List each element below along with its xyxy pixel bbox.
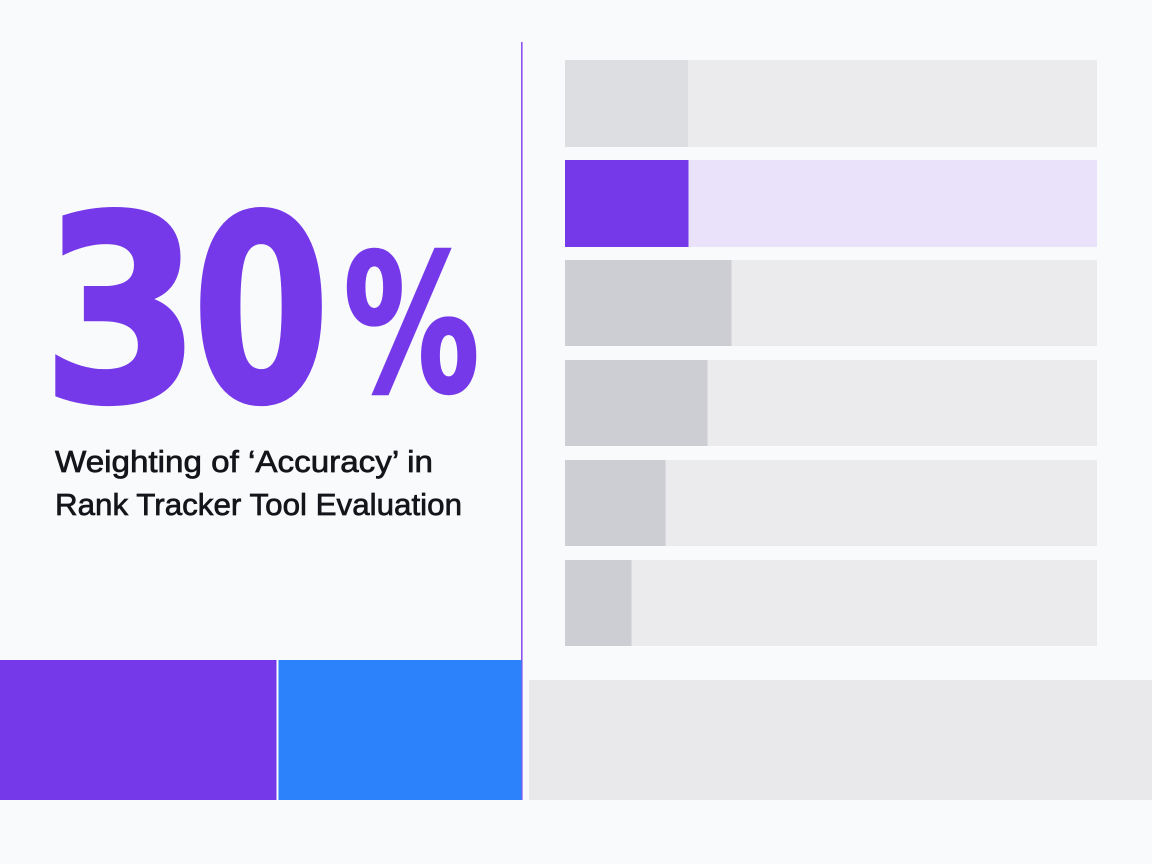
grey footer block — [529, 680, 1152, 800]
bar 2: highlighted — [565, 160, 1097, 247]
bar 4 — [565, 360, 1097, 446]
blue footer block — [278, 660, 522, 800]
bar chart — [565, 60, 1097, 646]
caption line 2: Rank Tracker Tool Evaluation — [55, 487, 462, 522]
digit 3: 3 — [42, 162, 201, 462]
vertical divider — [521, 42, 523, 800]
caption — [55, 444, 462, 522]
bar 1 — [565, 60, 1097, 147]
bar 5 — [565, 460, 1097, 546]
digit 0: 0 — [192, 162, 330, 462]
big statistic: 30% — [42, 162, 480, 462]
bar 3 — [565, 260, 1097, 346]
percent sign: % — [344, 215, 480, 437]
caption line 1: Weighting of ‘Accuracy’ in — [55, 444, 433, 479]
purple footer block — [0, 660, 276, 800]
bar 6 — [565, 560, 1097, 646]
